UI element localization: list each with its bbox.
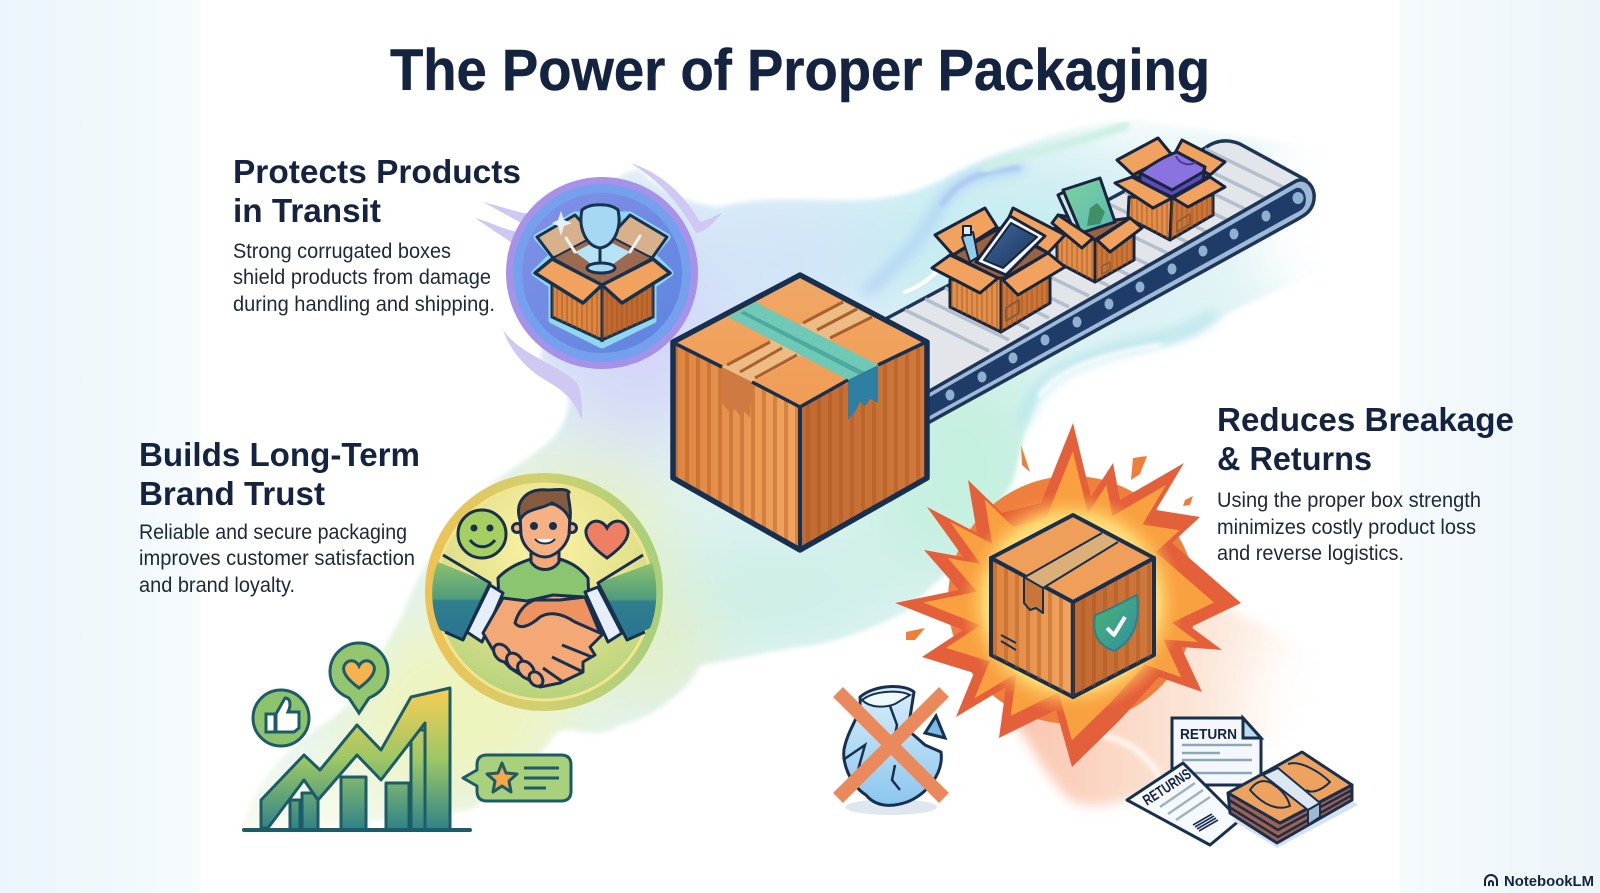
body: reduces breakage bbox=[1217, 489, 1481, 565]
icon: return document: RETURN bbox=[1180, 726, 1237, 743]
icon: stack of cash bbox=[1228, 752, 1358, 848]
belt side with rollers bbox=[926, 180, 1314, 424]
tablet bbox=[1058, 178, 1115, 233]
body: protects products: Strong corrugated boxes bbox=[233, 240, 451, 263]
shield bbox=[1094, 595, 1138, 651]
burst box bbox=[991, 515, 1154, 697]
body: protects products: during handling and shipping. bbox=[233, 293, 495, 316]
heading: builds trust bbox=[139, 436, 420, 512]
belt stripes bbox=[905, 149, 1285, 351]
bars bbox=[290, 730, 425, 830]
bottle bbox=[962, 232, 978, 262]
heading: reduces breakage: & Returns bbox=[1217, 440, 1372, 477]
heading: protects products bbox=[233, 153, 521, 229]
lower right peach swoosh bbox=[1012, 606, 1286, 812]
body: reduces breakage: minimizes costly product loss bbox=[1217, 516, 1476, 539]
wisps over the ribbon bbox=[868, 126, 1211, 420]
heading: protects products: in Transit bbox=[233, 192, 381, 229]
growth chart bbox=[244, 688, 470, 830]
heart bbox=[586, 521, 628, 558]
heading: protects products: Protects Products bbox=[233, 153, 521, 190]
icon: return document bbox=[1172, 718, 1261, 785]
body: protects products bbox=[233, 240, 495, 316]
icon: broken vase crossed out bbox=[838, 687, 945, 815]
body: builds trust: Reliable and secure packaging bbox=[139, 521, 407, 544]
flowing colour background ribbon bbox=[242, 120, 1292, 834]
rising arrow bbox=[261, 688, 450, 830]
body: reduces breakage: and reverse logistics. bbox=[1217, 542, 1404, 565]
body: builds trust: improves customer satisfaction bbox=[139, 547, 415, 570]
smiley bbox=[458, 510, 506, 558]
box with shirt on belt bbox=[1115, 138, 1225, 240]
icon: returns paperwork bbox=[1127, 763, 1240, 845]
icon: returns paperwork: RETURNS bbox=[1140, 766, 1194, 809]
glass bbox=[581, 205, 619, 273]
phone bbox=[976, 216, 1045, 275]
icon: heart pin badge bbox=[330, 643, 388, 713]
icon: impact burst with protected box bbox=[895, 423, 1241, 767]
panel: builds trust text bbox=[139, 436, 420, 597]
heading: builds trust: Builds Long-Term bbox=[139, 436, 420, 473]
box with phone on belt bbox=[932, 208, 1065, 332]
person bbox=[498, 490, 590, 625]
heading: reduces breakage: Reduces Breakage bbox=[1217, 401, 1514, 438]
folded shirt bbox=[1140, 152, 1205, 197]
heading: reduces breakage bbox=[1217, 401, 1514, 477]
icon: thumbs up badge bbox=[253, 690, 309, 746]
sleeves bbox=[432, 555, 656, 642]
belt surface bbox=[880, 141, 1306, 395]
tan tape bbox=[722, 302, 872, 418]
icon: protected glass in open box circle bbox=[475, 163, 722, 420]
teal tape bbox=[728, 302, 878, 420]
body: builds trust bbox=[139, 521, 415, 597]
logo: NotebookLM: NotebookLM bbox=[1504, 874, 1594, 890]
body: reduces breakage: Using the proper box strength bbox=[1217, 489, 1481, 512]
flying fragments bbox=[906, 445, 1193, 640]
body: protects products: shield products from damage bbox=[233, 266, 491, 289]
icon: handshake circle bbox=[425, 473, 663, 711]
icon: star review bubble bbox=[463, 755, 571, 801]
main corrugated box bbox=[673, 275, 927, 550]
panel: protects products text bbox=[233, 153, 521, 316]
body: builds trust: and brand loyalty. bbox=[139, 574, 295, 597]
heading: builds trust: Brand Trust bbox=[139, 475, 325, 512]
panel: reduces breakage text bbox=[1217, 401, 1514, 565]
title: The Power of Proper Packaging bbox=[390, 38, 1210, 103]
box with tablet on belt bbox=[1052, 178, 1142, 282]
conveyor belt bbox=[880, 141, 1314, 424]
shaking hands bbox=[483, 595, 602, 689]
